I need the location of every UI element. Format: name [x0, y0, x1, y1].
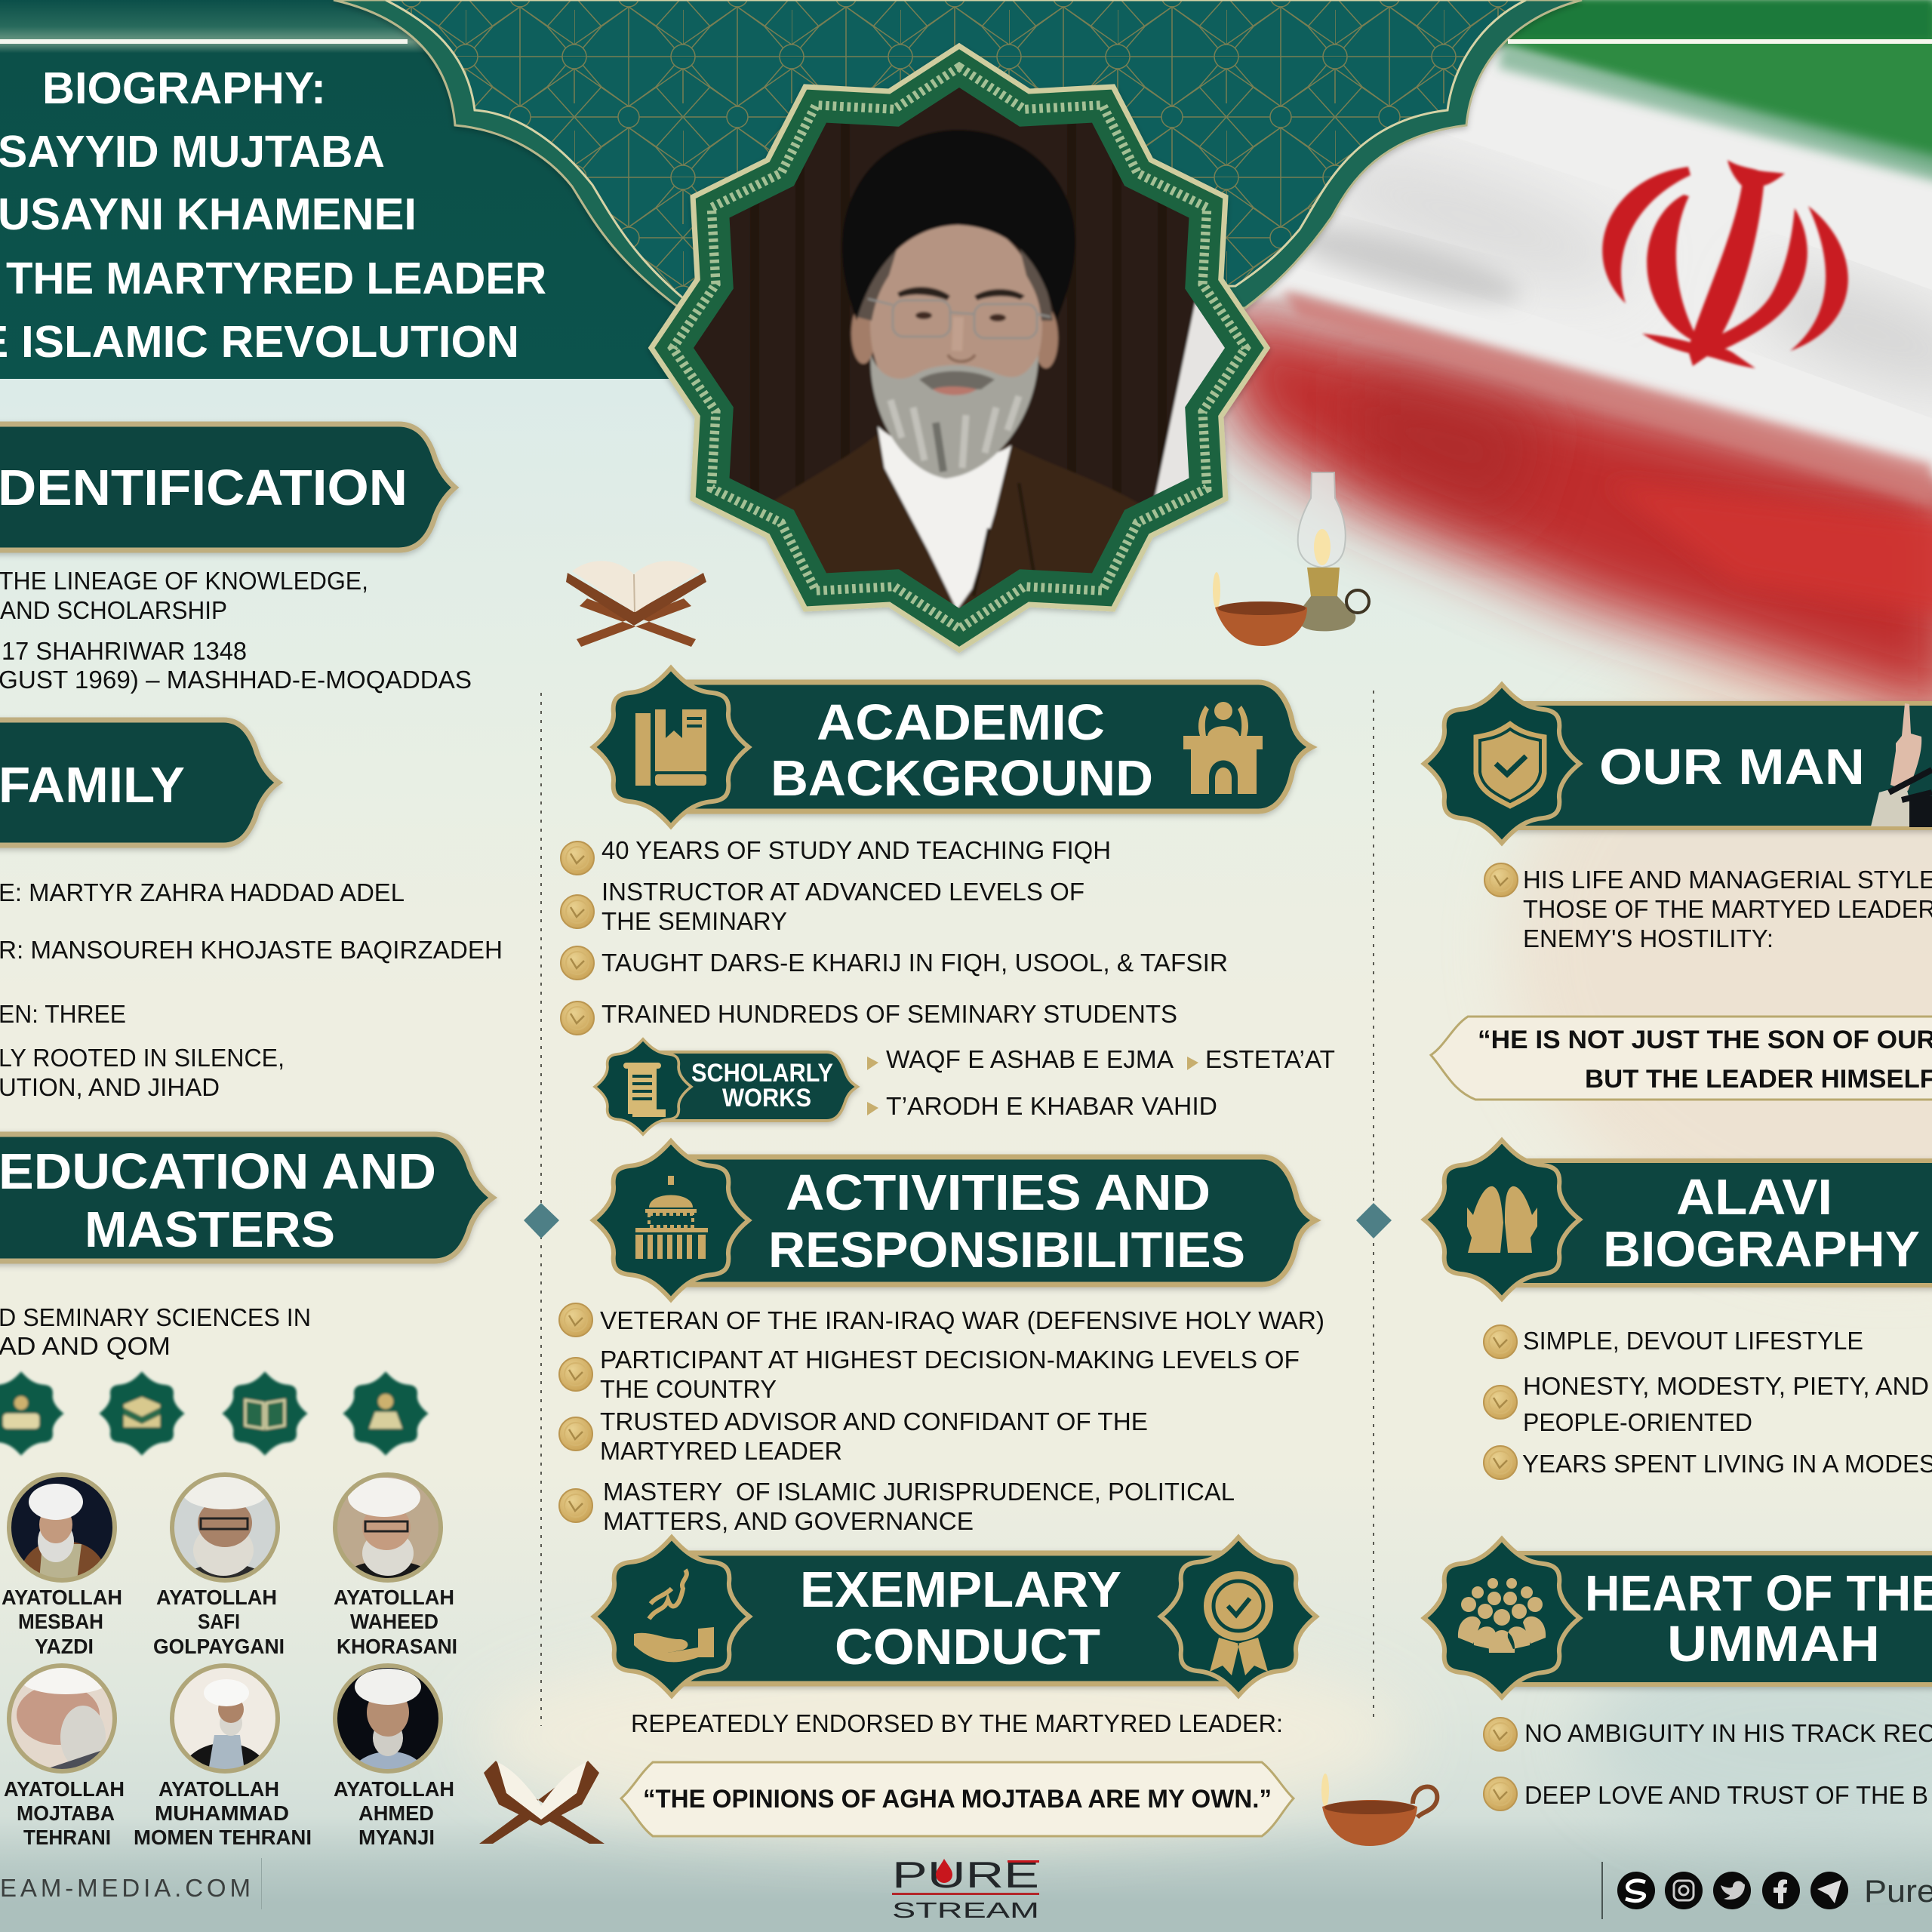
- image: raised hand with microphones: [1871, 703, 1932, 827]
- our man text: HIS LIFE AND MANAGERIAL STYLE: [1523, 866, 1932, 894]
- banner: alavi biography: [1424, 1140, 1932, 1299]
- activities bullets: THE COUNTRY: [600, 1375, 777, 1403]
- education text: [0, 1303, 311, 1360]
- icon: quran on stand, top: [566, 561, 706, 647]
- icon: scroll: [623, 1063, 666, 1117]
- identification text: 17 SHAHRIWAR 1348: [2, 637, 247, 665]
- master names: AYATOLLAH: [334, 1777, 454, 1801]
- master names: AHMED: [358, 1801, 434, 1825]
- panel: exemplary conduct: [594, 1537, 1316, 1836]
- icon: facebook: [1762, 1872, 1800, 1909]
- academic bullets: 40 YEARS OF STUDY AND TEACHING FIQH: [601, 836, 1111, 864]
- flag: pale seam on red edge: [1283, 291, 1932, 506]
- academic bullets: THE SEMINARY: [601, 907, 787, 935]
- quote box: leader himself: BUT THE LEADER HIMSELF: [1585, 1065, 1932, 1094]
- icon: teacher with students: [0, 1371, 64, 1456]
- master names: WAHEED: [350, 1610, 438, 1633]
- panel: heart of the ummah: [1424, 1539, 1932, 1810]
- scholarly works badge: SCHOLARLY: [691, 1059, 833, 1088]
- white top rule, left: [0, 39, 408, 44]
- master names: MYANJI: [358, 1826, 435, 1849]
- lamp glass: [1298, 472, 1346, 568]
- banner: alavi biography: BIOGRAPHY: [1603, 1221, 1920, 1278]
- quote box: [621, 1762, 1294, 1836]
- identification text: THE LINEAGE OF KNOWLEDGE,: [0, 567, 368, 595]
- quote box: “THE OPINIONS OF AGHA MOJTABA ARE MY OWN.”: [643, 1785, 1272, 1814]
- flag: green stripe: [1479, 0, 1932, 177]
- portrait: Mesbah Yazdi: [9, 1475, 115, 1580]
- master names: TEHRANI: [23, 1826, 111, 1849]
- banner: exemplary conduct: CONDUCT: [835, 1619, 1100, 1675]
- portrait: Ahmed Myanji: [335, 1666, 441, 1771]
- icon: clay lamp, bottom: [1321, 1774, 1437, 1846]
- panel: family: [0, 720, 503, 1101]
- alavi bullets: PEOPLE-ORIENTED: [1523, 1408, 1752, 1436]
- activities bullets: MATTERS, AND GOVERNANCE: [603, 1507, 974, 1535]
- banner: family: [0, 720, 278, 845]
- family text: [0, 878, 503, 1101]
- banner: exemplary conduct: EXEMPLARY: [800, 1561, 1121, 1618]
- lamp brass body: [1307, 568, 1340, 596]
- alavi bullets: [1484, 1325, 1932, 1479]
- icon: clay lamp, top: [1213, 572, 1307, 646]
- master names: MOJTABA: [17, 1801, 115, 1825]
- lamp flame: [1314, 529, 1331, 565]
- icon: open quran: [99, 1371, 185, 1456]
- panel: identification: [0, 424, 472, 694]
- portrait: Safi Golpaygani: [172, 1475, 278, 1580]
- family text: E: MARTYR ZAHRA HADDAD ADEL: [0, 878, 405, 906]
- title: SAYYID MUJTABA: [0, 127, 385, 177]
- icon: crowd of people: [1458, 1578, 1546, 1653]
- icon: book: [222, 1371, 308, 1456]
- family text: UTION, AND JIHAD: [0, 1073, 220, 1101]
- heart of the ummah bullets: NO AMBIGUITY IN HIS TRACK REC: [1524, 1719, 1932, 1747]
- activities bullets: MARTYRED LEADER: [600, 1437, 842, 1465]
- banner: academic background: [593, 668, 1312, 826]
- icon: shield: [1475, 722, 1546, 808]
- icon: scholar figure: [343, 1371, 429, 1456]
- banner: identification: DENTIFICATION: [0, 460, 408, 516]
- our man text: THOSE OF THE MARTYED LEADER: [1523, 895, 1932, 923]
- footer: social icons: [1601, 1862, 1932, 1919]
- portrait frame with photo: [641, 45, 1283, 664]
- icon row: seminary sciences: [0, 1371, 429, 1456]
- icon: praying hands: [1467, 1186, 1537, 1253]
- icon: telegram: [1810, 1872, 1848, 1909]
- portrait: Mojtaba Tehrani: [9, 1664, 115, 1771]
- decorative arch with Islamic geometric pattern: [334, 0, 1582, 308]
- identification text: [0, 567, 472, 694]
- flag: white stripe: [1177, 0, 1932, 485]
- title: THE MARTYRED LEADER: [6, 254, 546, 303]
- icon: quran on stand, bottom: [479, 1761, 605, 1844]
- title: USAYNI KHAMENEI: [0, 189, 417, 239]
- panel: activities and responsibilities: [559, 1141, 1324, 1535]
- activities bullets: TRUSTED ADVISOR AND CONFIDANT OF THE: [600, 1407, 1148, 1435]
- top-left title band: [0, 0, 679, 379]
- scholarly works list: WAQF E ASHAB E EJMA: [886, 1045, 1174, 1073]
- banner: identification: [0, 424, 455, 550]
- master names: AYATOLLAH: [2, 1586, 122, 1609]
- scholarly works badge: WORKS: [722, 1084, 811, 1112]
- footer: Pure Stream logo: [892, 1855, 1039, 1923]
- endorsement text: REPEATEDLY ENDORSED BY THE MARTYRED LEADER:: [631, 1709, 1283, 1737]
- alavi bullets: SIMPLE, DEVOUT LIFESTYLE: [1523, 1327, 1863, 1355]
- icon: hand with calligraphy: [634, 1570, 714, 1662]
- banner: education: MASTERS: [85, 1201, 335, 1258]
- our man text: ENEMY'S HOSTILITY:: [1523, 924, 1774, 952]
- banner: alavi biography: ALAVI: [1676, 1169, 1832, 1226]
- scholarly works list: T’ARODH E KHABAR VAHID: [886, 1092, 1217, 1120]
- identification text: GUST 1969) – MASHHAD-E-MOQADDAS: [0, 666, 472, 694]
- icon: twitter: [1713, 1872, 1751, 1909]
- master names: MESBAH: [18, 1610, 103, 1633]
- banner: heart of the ummah: [1424, 1539, 1932, 1697]
- title: BIOGRAPHY:: [42, 63, 326, 113]
- family text: R: MANSOUREH KHOJASTE BAQIRZADEH: [0, 936, 503, 964]
- activities bullets: MASTERY OF ISLAMIC JURISPRUDENCE, POLITICAL: [603, 1478, 1235, 1506]
- icon: s network: [1617, 1872, 1655, 1909]
- banner: activities: RESPONSIBILITIES: [768, 1222, 1245, 1278]
- flag: emblem: [1602, 160, 1848, 368]
- footer handle: Pure: [1864, 1873, 1932, 1909]
- icon: podium: [1183, 702, 1263, 794]
- master names: AYATOLLAH: [4, 1777, 125, 1801]
- banner: heart of the ummah: UMMAH: [1667, 1616, 1880, 1672]
- academic bullets: TAUGHT DARS-E KHARIJ IN FIQH, USOOL, & TAFSIR: [601, 949, 1228, 977]
- banner: activities: ACTIVITIES AND: [786, 1164, 1211, 1221]
- master names: GOLPAYGANI: [153, 1635, 285, 1658]
- dotted divider: right: [1373, 691, 1374, 1721]
- Iranian flag background: [1177, 0, 1932, 724]
- banner: our man: [1424, 685, 1932, 843]
- panel: alavi biography: [1424, 1140, 1932, 1479]
- icon: award ribbon: [1204, 1571, 1273, 1675]
- activities bullets: PARTICIPANT AT HIGHEST DECISION-MAKING LEVELS OF: [600, 1346, 1300, 1374]
- master names: SAFI: [198, 1610, 240, 1633]
- photo: portrait of the subject: [694, 88, 1225, 608]
- icon: oil lamp: [1297, 472, 1369, 631]
- title: [0, 63, 546, 367]
- frame: twelve-point star: [651, 46, 1267, 650]
- banner: family: FAMILY: [0, 757, 185, 814]
- family text: EN: THREE: [0, 1000, 126, 1028]
- diamond: right: [1356, 1203, 1392, 1238]
- education text: D SEMINARY SCIENCES IN: [0, 1303, 311, 1331]
- family text: LY ROOTED IN SILENCE,: [0, 1044, 285, 1072]
- master names: AYATOLLAH: [156, 1586, 277, 1609]
- footer: Pure Stream logo: PURE: [892, 1855, 1039, 1896]
- activities bullets: [559, 1303, 1324, 1535]
- diamond: left: [524, 1203, 559, 1238]
- identification text: AND SCHOLARSHIP: [0, 596, 227, 624]
- master names: AYATOLLAH: [334, 1586, 454, 1609]
- quote box: leader himself: [1431, 1017, 1932, 1100]
- master names: YAZDI: [35, 1635, 94, 1658]
- academic bullets: [561, 836, 1228, 1035]
- heart of the ummah bullets: DEEP LOVE AND TRUST OF THE B: [1524, 1781, 1928, 1809]
- white top rule, right: [1508, 39, 1932, 44]
- master names: [2, 1586, 457, 1849]
- alavi bullets: HONESTY, MODESTY, PIETY, AND: [1523, 1372, 1929, 1400]
- our man text: [1484, 863, 1932, 952]
- scholarly works list: ESTETA’AT: [1205, 1045, 1335, 1073]
- footer: website address: EAM-MEDIA.COM: [0, 1874, 251, 1902]
- master names: MOMEN TEHRANI: [134, 1826, 312, 1849]
- master names: MUHAMMAD: [155, 1801, 289, 1825]
- scholarly works list: [867, 1045, 1335, 1120]
- icon: books: [635, 708, 706, 786]
- panel: academic background: [561, 668, 1335, 1134]
- banner: education: [0, 1134, 493, 1261]
- scholarly works badge: [595, 1039, 857, 1134]
- panel: education and masters: [0, 1134, 493, 1849]
- education text: AD AND QOM: [0, 1332, 171, 1360]
- academic bullets: INSTRUCTOR AT ADVANCED LEVELS OF: [601, 878, 1084, 906]
- banner: activities: [593, 1141, 1315, 1300]
- banner: academic background: BACKGROUND: [771, 750, 1153, 807]
- heart of the ummah bullets: [1484, 1718, 1932, 1810]
- master names: KHORASANI: [337, 1635, 457, 1658]
- master names: AYATOLLAH: [158, 1777, 279, 1801]
- flag: red stripe: [1208, 302, 1932, 724]
- portrait: Muhammad Momen Tehrani: [172, 1666, 278, 1771]
- footer: Pure Stream logo: STREAM: [892, 1899, 1039, 1923]
- quote box: leader himself: “HE IS NOT JUST THE SON OF OUR: [1478, 1026, 1932, 1054]
- dotted divider: left: [540, 693, 542, 1726]
- panel: our man: [1424, 685, 1932, 1100]
- icon: domed building: [635, 1176, 708, 1259]
- portrait: Waheed Khorasani: [335, 1475, 441, 1580]
- icon: instagram: [1665, 1872, 1703, 1909]
- banner: exemplary conduct: [594, 1537, 1316, 1696]
- banner: our man: OUR MAN: [1599, 739, 1865, 795]
- academic bullets: TRAINED HUNDREDS OF SEMINARY STUDENTS: [601, 1000, 1177, 1028]
- activities bullets: VETERAN OF THE IRAN-IRAQ WAR (DEFENSIVE HOLY WAR): [600, 1306, 1324, 1334]
- banner: academic background: ACADEMIC: [817, 694, 1105, 751]
- banner: education: EDUCATION AND: [0, 1143, 436, 1200]
- alavi bullets: YEARS SPENT LIVING IN A MODES: [1522, 1450, 1932, 1478]
